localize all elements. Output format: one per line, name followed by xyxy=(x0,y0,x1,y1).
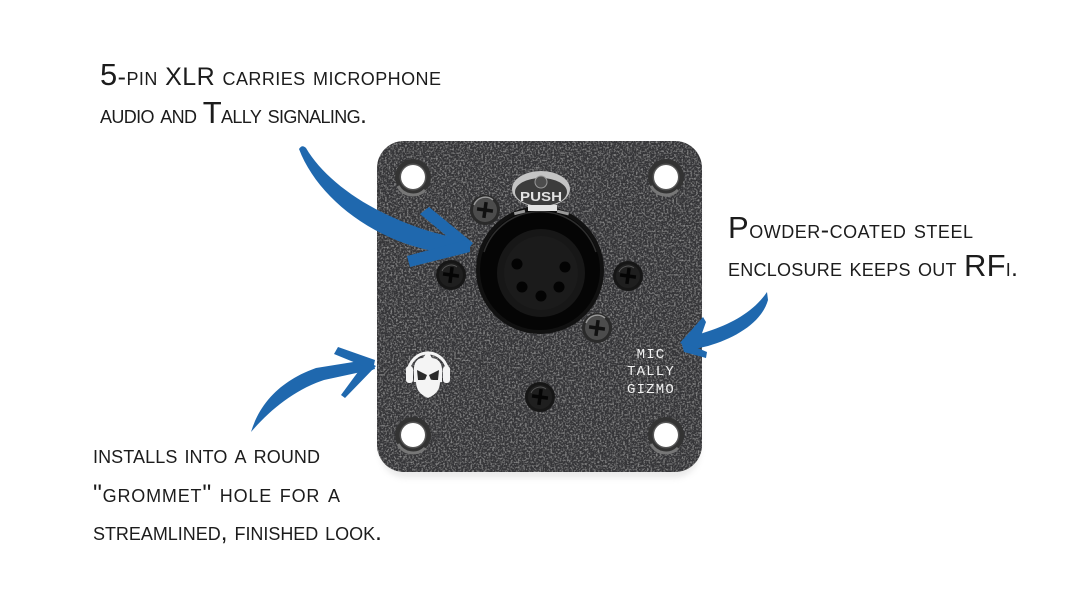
text block: steel enclosure note: enclosure keeps out RFi. xyxy=(728,248,1018,283)
push latch xyxy=(512,171,570,215)
screw: upper left xyxy=(470,195,500,225)
XLR connector xyxy=(476,206,604,334)
text block: steel enclosure note: Powder-coated steel xyxy=(728,210,973,245)
text block: steel enclosure note xyxy=(728,210,1018,283)
text block: XLR note: 5-pin XLR carries microphone xyxy=(100,57,441,92)
arrow: to steel enclosure xyxy=(680,292,768,358)
text block: XLR note xyxy=(100,57,441,130)
text block: XLR note: audio and Tally signaling. xyxy=(100,95,367,130)
mounting hole: bottom left xyxy=(395,417,431,453)
text block: grommet note: streamlined, finished look. xyxy=(93,518,382,546)
panel: device faceplate xyxy=(377,141,702,478)
mounting hole: top right xyxy=(648,159,684,195)
logo: bearded headphone mascot xyxy=(406,351,450,398)
arrow: to plate from grommet note xyxy=(251,347,376,432)
plate shadow xyxy=(380,150,700,478)
push latch: PUSH xyxy=(520,189,562,204)
pins xyxy=(512,258,570,302)
product label xyxy=(627,347,675,398)
powder-coated steel plate xyxy=(377,141,702,472)
product label: GIZMO xyxy=(627,382,675,398)
product label: MIC xyxy=(637,347,665,363)
arrow: to XLR connector xyxy=(299,146,473,267)
text block: grommet note: "grommet" hole for a xyxy=(93,480,340,508)
screw: lower right xyxy=(582,313,612,343)
mounting hole: top left xyxy=(395,159,431,195)
text block: grommet note: installs into a round xyxy=(93,441,320,469)
screw: right xyxy=(613,261,643,291)
screw: left xyxy=(436,260,466,290)
mounting hole: bottom right xyxy=(648,417,684,453)
product label: TALLY xyxy=(627,364,675,380)
text block: grommet note xyxy=(93,441,382,546)
screw: bottom xyxy=(525,382,555,412)
